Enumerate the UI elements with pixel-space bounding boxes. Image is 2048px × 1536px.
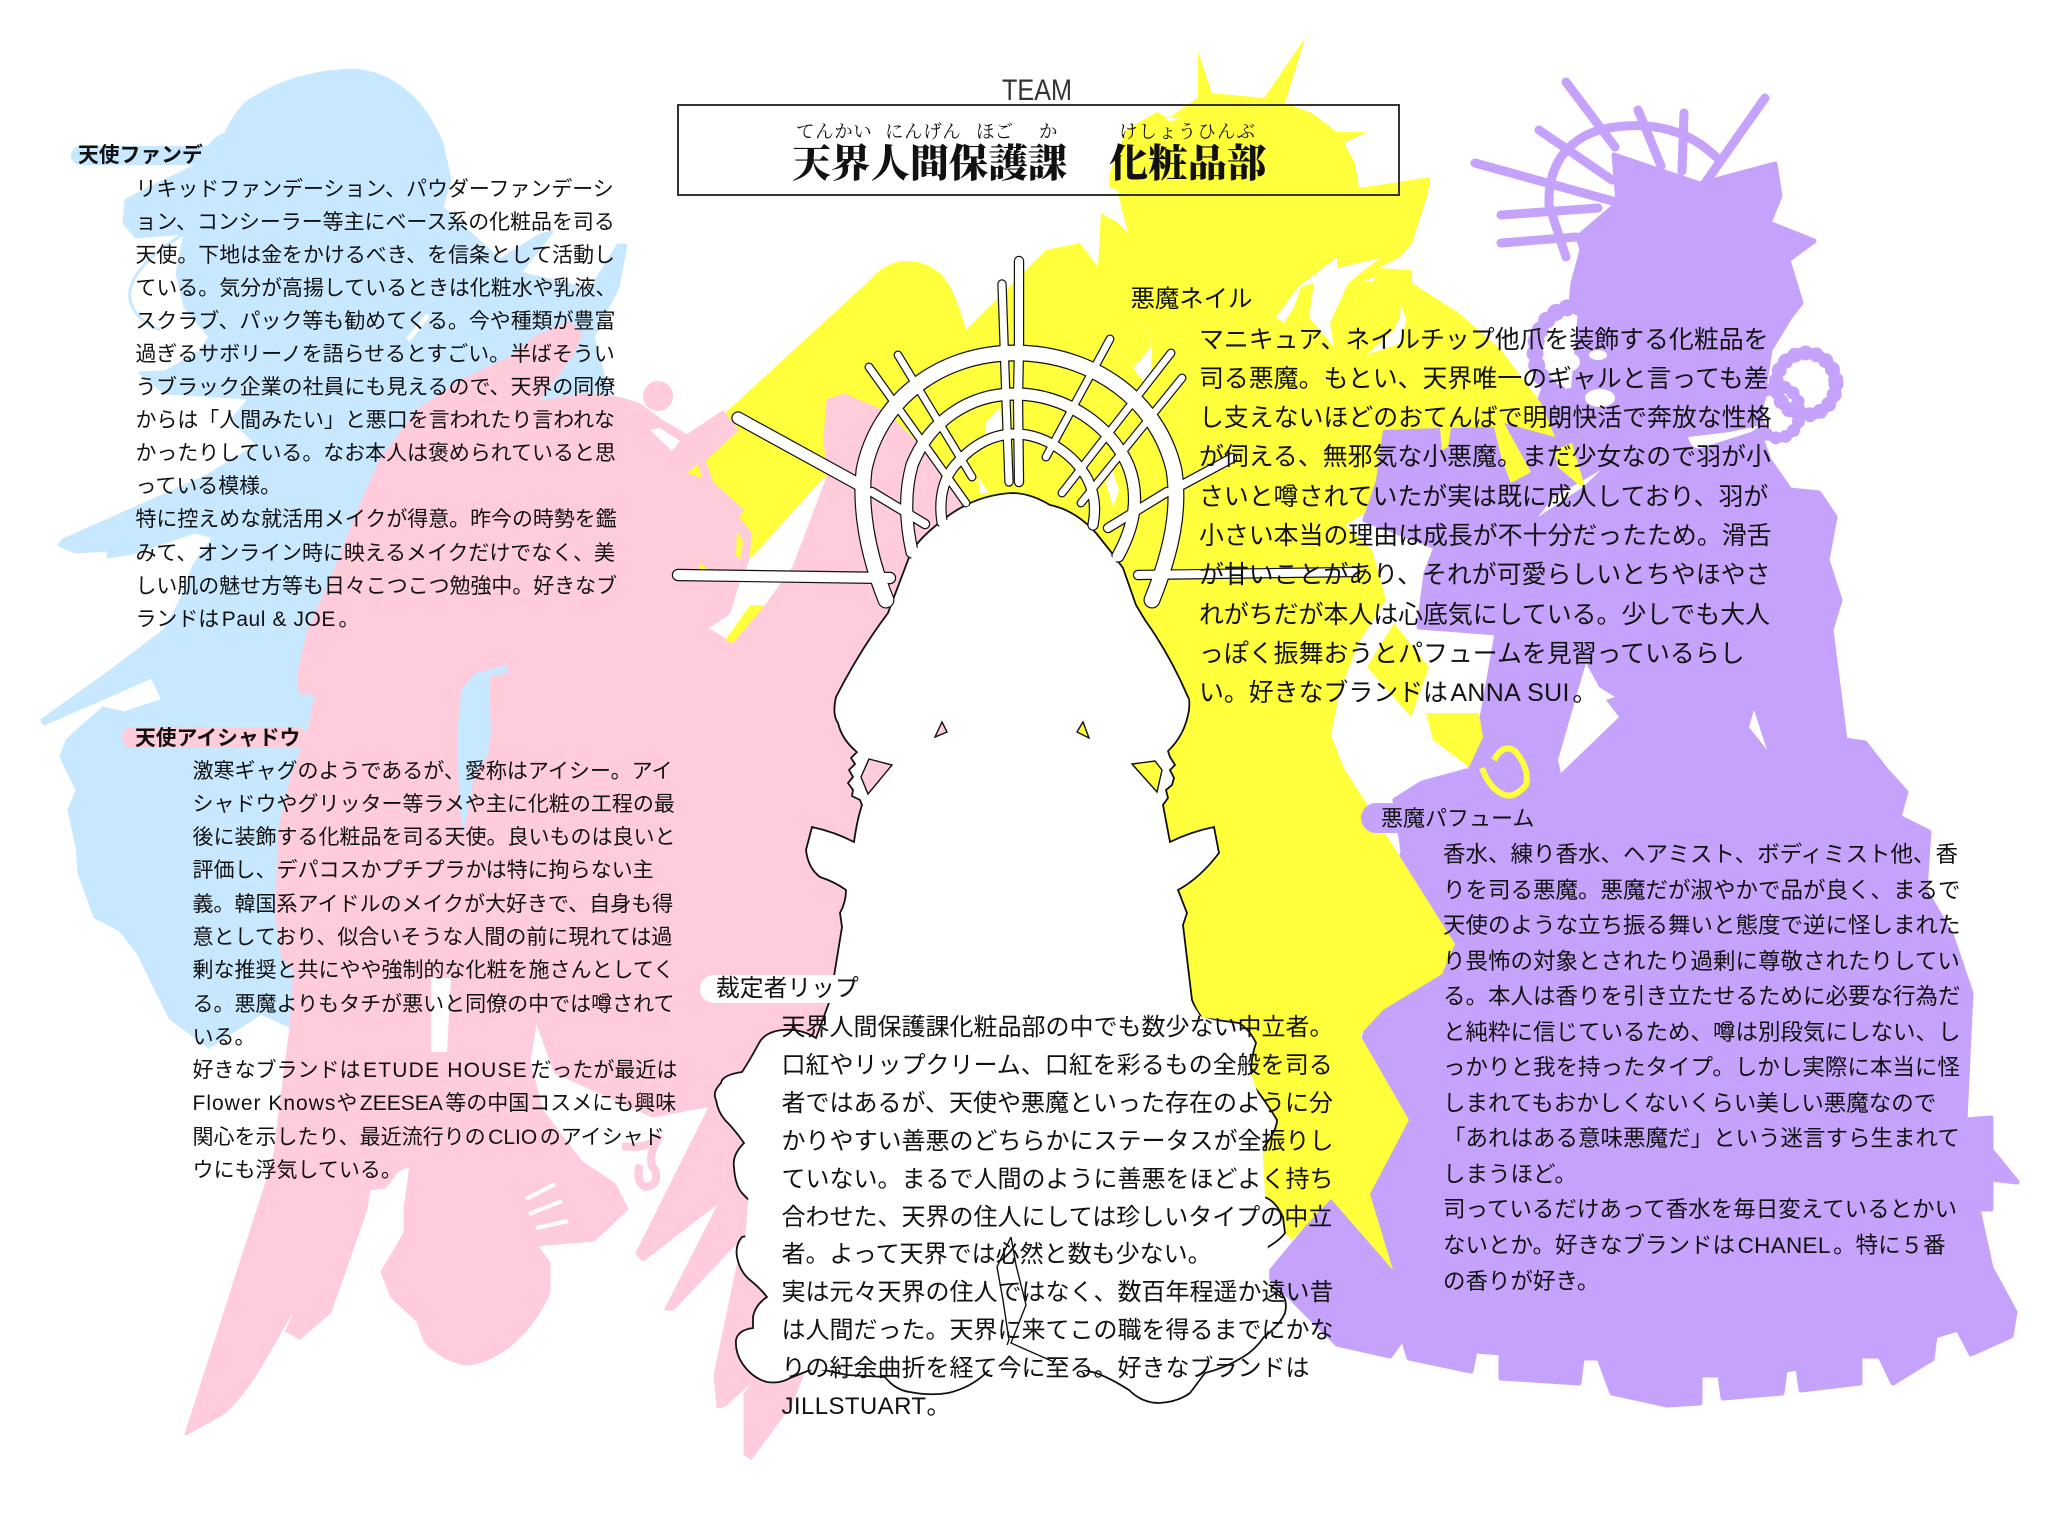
text: angel eyeshadow: Flower KnowsやZEESEA等の中国コスメにも興味: [192, 1092, 676, 1115]
text: angel eyeshadow: 剰な推奨と共にやや強制的な化粧を施さんとしてく: [192, 959, 674, 982]
text: judge lip: りの紆余曲折を経て今に至る。好きなブランドは: [782, 1355, 1310, 1382]
title: department name: 天界人間保護課: [792, 133, 1067, 189]
text: angel foundation: ている。気分が高揚しているときは化粧水や乳液、: [136, 277, 616, 300]
text: devil nail: い。好きなブランドはANNA SUI。: [1199, 679, 1597, 707]
text: devil perfume: り畏怖の対象とされたり過剰に尊敬されたりしてい: [1443, 949, 1960, 974]
heading: angel foundation: 天使ファンデ: [78, 144, 203, 166]
central white figure with halo crown and lip cloud: [678, 261, 1355, 1403]
text: devil nail: さいと噂されていたが実は既に成人しており、羽が: [1199, 483, 1768, 511]
text: devil perfume: 香水、練り香水、ヘアミスト、ボディミスト他、香: [1443, 842, 1958, 867]
text: devil perfume: と純粋に信じているため、噂は別段気にしない、し: [1443, 1020, 1961, 1045]
text: angel foundation: スクラブ、パック等も勧めてくる。今や種類が豊富: [136, 310, 615, 333]
text: devil perfume: しまれてもおかしくないくらい美しい悪魔なので: [1443, 1091, 1936, 1116]
text: devil nail: 小さい本当の理由は成長が不十分だったため。滑舌: [1199, 522, 1772, 550]
text: devil nail: [1199, 326, 1772, 707]
text: angel foundation: うブラック企業の社員にも見えるので、天界の同僚: [136, 376, 615, 399]
text: judge lip: 者ではあるが、天使や悪魔といった存在のように分: [782, 1090, 1333, 1117]
text: angel eyeshadow: 好きなブランドはETUDE HOUSEだったが最近は: [192, 1059, 677, 1082]
text: angel eyeshadow: 関心を示したり、最近流行りのCLIOのアイシャド: [192, 1126, 665, 1149]
text: angel foundation: しい肌の魅せ方等も日々こつこつ勉強中。好きなブ: [136, 575, 617, 598]
text: angel eyeshadow: [192, 760, 677, 1182]
text: angel foundation: からは「人間みたい」と悪口を言われたり言われな: [136, 409, 615, 432]
text: devil nail: れがちだが本人は心底気にしている。少しでも大人: [1199, 601, 1770, 629]
text: angel foundation: リキッドファンデーション、パウダーファンデーシ: [136, 178, 614, 200]
text: angel eyeshadow: 意としており、似合いそうな人間の前に現れては過: [192, 926, 672, 949]
ruby: keshouhinbu: けしょうひんぶ: [1119, 118, 1256, 144]
heading: devil nail: 悪魔ネイル: [1130, 286, 1252, 313]
text: devil nail: が伺える、無邪気な小悪魔。まだ少女なので羽が小: [1199, 443, 1771, 471]
ruby: tenkai: てんかい: [796, 118, 872, 144]
text: angel foundation: [136, 178, 617, 631]
text: devil perfume: る。本人は香りを引き立たせるために必要な行為だ: [1443, 984, 1961, 1009]
silhouette: pink angel: [186, 323, 1000, 1458]
text: angel foundation: 過ぎるサボリーノを語らせるとすごい。半ばそうい: [136, 343, 615, 366]
text: angel eyeshadow: 義。韓国系アイドルのメイクが大好きで、自身も得: [192, 893, 673, 916]
heading: devil perfume: 悪魔パフューム: [1381, 806, 1534, 831]
text: devil perfume: 天使のような立ち振る舞いと態度で逆に怪しまれた: [1443, 913, 1961, 938]
text: devil nail: マニキュア、ネイルチップ他爪を装飾する化粧品を: [1199, 326, 1768, 354]
silhouette: yellow devil: [704, 38, 1585, 1270]
text: angel foundation: 天使。下地は金をかけるべき、を信条として活動し: [136, 244, 615, 267]
text: devil nail: が甘いことがあり、それが可愛らしいとちやほやさ: [1199, 561, 1770, 589]
text: angel eyeshadow: 後に装飾する化粧品を司る天使。良いものは良いと: [192, 826, 676, 849]
text: angel foundation: みて、オンライン時に映えるメイクだけでなく、美: [136, 542, 615, 565]
text: angel eyeshadow: 激寒ギャグのようであるが、愛称はアイシー。アイ: [192, 760, 673, 782]
text: devil perfume: 「あれはある意味悪魔だ」という迷言すら生まれて: [1443, 1126, 1960, 1151]
text: angel eyeshadow: シャドウやグリッター等ラメや主に化粧の工程の最: [192, 793, 675, 816]
text: judge lip: ていない。まるで人間のように善悪をほどよく持ち: [782, 1166, 1334, 1193]
text: judge lip: JILLSTUART。: [782, 1393, 950, 1420]
text: judge lip: 者。よって天界では必然と数も少ない。: [782, 1241, 1212, 1268]
text: devil perfume: りを司る悪魔。悪魔だが淑やかで品が良く、まるで: [1443, 878, 1961, 903]
title: section name: 化粧品部: [1109, 133, 1266, 189]
yellow silhouette fragments over pink: [687, 464, 765, 643]
text: judge lip: 合わせた、天界の住人にしては珍しいタイプの中立: [782, 1204, 1332, 1231]
heading: angel eyeshadow: 天使アイシャドウ: [135, 726, 300, 750]
text: judge lip: 実は元々天界の住人ではなく、数百年程遥か遠い昔: [782, 1279, 1334, 1306]
text: angel foundation: ョン、コンシーラー等主にベース系の化粧品を司る: [136, 211, 615, 234]
silhouette: purple devil: [1268, 82, 2017, 1405]
ruby: ningen: にんげん: [885, 118, 961, 144]
text: angel eyeshadow: ウにも浮気している。: [192, 1159, 402, 1182]
title box: [677, 104, 1400, 196]
text: devil perfume: っかりと我を持ったタイプ。しかし実際に本当に怪: [1443, 1055, 1960, 1080]
text: devil nail: 司る悪魔。もとい、天界唯一のギャルと言っても差: [1199, 365, 1768, 393]
text: judge lip: [782, 1014, 1334, 1420]
text: judge lip: 口紅やリップクリーム、口紅を彩るもの全般を司る: [782, 1052, 1333, 1079]
text: angel foundation: ランドはPaul & JOE。: [136, 608, 359, 631]
ruby: ka: か: [1039, 118, 1058, 144]
text: devil perfume: 司っているだけあって香水を毎日変えているとかい: [1443, 1197, 1957, 1222]
text: angel eyeshadow: いる。: [192, 1026, 256, 1049]
text: angel eyeshadow: 評価し、デパコスかプチプラかは特に拘らない主: [192, 859, 654, 882]
text: judge lip: かりやすい善悪のどちらかにステータスが全振りし: [782, 1128, 1334, 1155]
text: angel foundation: 特に控えめな就活用メイクが得意。昨今の時勢を鑑: [136, 508, 617, 531]
text: devil nail: し支えないほどのおてんばで明朗快活で奔放な性格: [1199, 404, 1772, 432]
text: devil perfume: の香りが好き。: [1443, 1269, 1599, 1294]
ruby: hogo: ほご: [976, 118, 1013, 144]
text: devil perfume: [1443, 842, 1961, 1294]
text: angel foundation: っている模様。: [136, 475, 281, 498]
heading: judge lip: 裁定者リップ: [716, 975, 859, 1002]
text: judge lip: 天界人間保護課化粧品部の中でも数少ない中立者。: [782, 1014, 1334, 1041]
team label: TEAM: [1002, 74, 1072, 107]
text: judge lip: は人間だった。天界に来てこの職を得るまでにかな: [782, 1317, 1334, 1344]
text: angel foundation: かったりしている。なお本人は褒められていると思: [136, 442, 616, 465]
text: devil perfume: ないとか。好きなブランドはCHANEL。特に５番: [1443, 1233, 1946, 1258]
text: devil nail: っぽく振舞おうとパフュームを見習っているらし: [1199, 640, 1745, 668]
silhouette: blue angel: [42, 70, 626, 1047]
text: devil perfume: しまうほど。: [1443, 1162, 1577, 1187]
heading: devil perfume: [1361, 803, 1547, 833]
text: angel eyeshadow: る。悪魔よりもタチが悪いと同僚の中では噂されて: [192, 993, 674, 1016]
